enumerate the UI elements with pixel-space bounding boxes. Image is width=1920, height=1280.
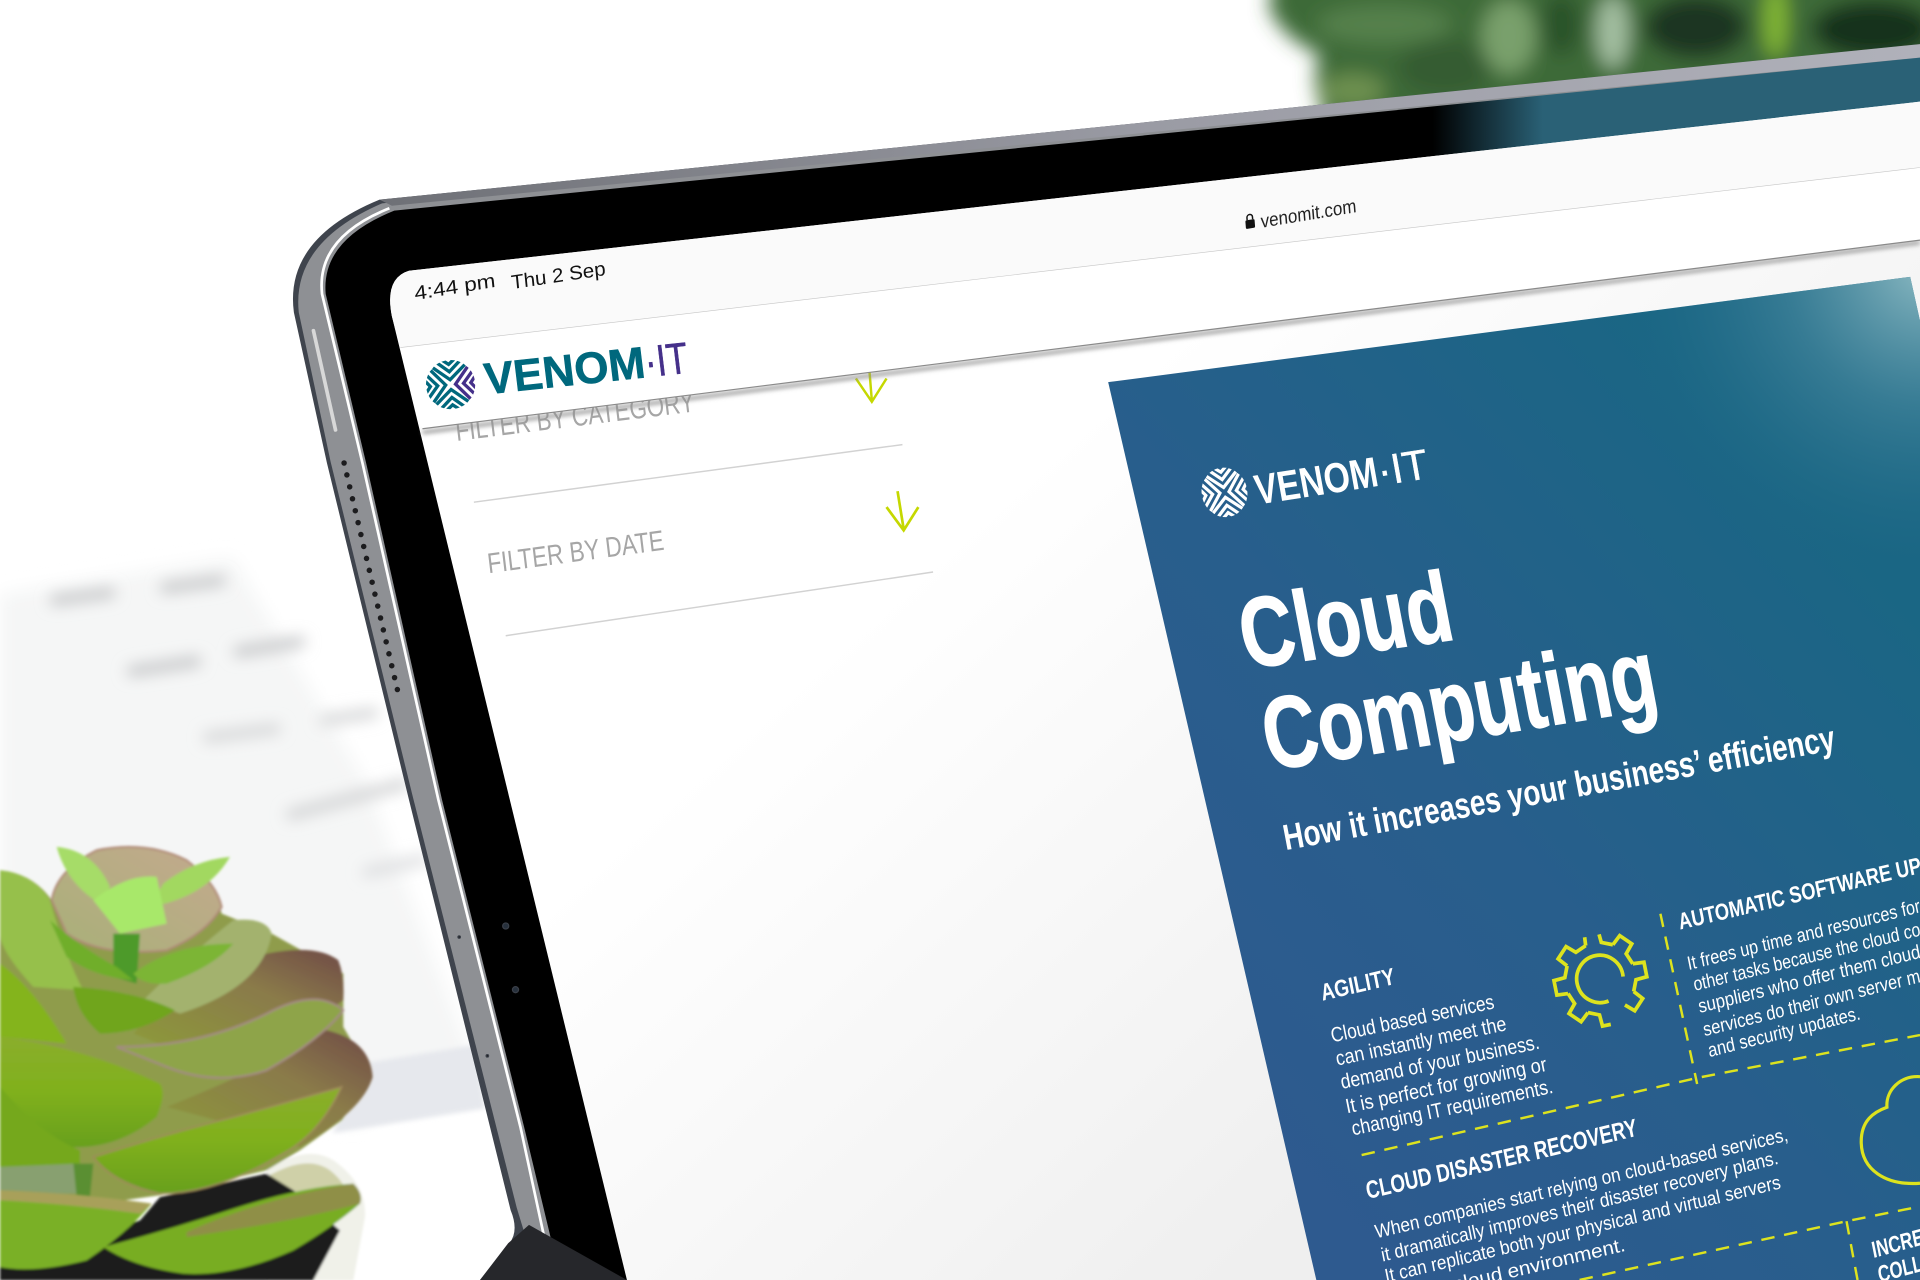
filter divider one: [474, 445, 902, 502]
filter by category: FILTER BY CATEGORY: [454, 386, 697, 448]
succulent plant: [0, 847, 373, 1280]
screen: [390, 102, 1920, 1280]
document logo wordmark: VENOM: [1251, 448, 1382, 514]
arrow: category: [856, 355, 887, 402]
venom logo wordmark: ·IT: [642, 334, 691, 387]
camera sensors: [458, 923, 519, 1057]
lock icon: [1245, 214, 1255, 229]
section: agility: [1318, 963, 1555, 1140]
section: cloud disaster recovery: CLOUD DISASTER RECOVERY: [1363, 1114, 1640, 1205]
section: agility: AGILITY: [1318, 963, 1397, 1007]
side button: [313, 331, 336, 430]
section: agility: It is perfect for growing or: [1343, 1053, 1549, 1118]
title: Computing: [1253, 617, 1666, 792]
section: agility: demand of your business.: [1339, 1031, 1541, 1094]
venom logo wordmark: VENOM: [481, 338, 648, 404]
panel: cloud computing document: [1108, 277, 1920, 1280]
section: agility: can instantly meet the: [1334, 1012, 1508, 1071]
document logo wordmark: ·IT: [1373, 440, 1432, 495]
filter by date: FILTER BY DATE: [486, 525, 666, 580]
speaker grille: [344, 463, 398, 692]
filter divider two: [506, 572, 933, 636]
section: cloud disaster recovery: When companies start relying on cloud-based services,: [1373, 1124, 1790, 1243]
status date: Thu 2 Sep: [510, 258, 607, 294]
blurred paper on desk: [0, 557, 485, 1133]
section: increased collaboration: [1869, 1224, 1920, 1280]
title: Cloud: [1230, 551, 1461, 690]
arrow: date: [887, 491, 918, 530]
section: automatic software updates: [1676, 852, 1920, 1062]
section: agility: Cloud based services: [1329, 991, 1496, 1047]
url: venomit.com: [1260, 196, 1357, 233]
icon: venom logo mark: [426, 360, 476, 410]
header shadow: [422, 243, 1920, 432]
status time: 4:44 pm: [413, 270, 496, 305]
icon: gear: [1546, 924, 1655, 1034]
browser toolbar: [390, 102, 1920, 348]
section: automatic software updates: and security updates.: [1706, 1003, 1862, 1062]
section: cloud disaster recovery: it dramatically improves their disaster recovery plans.: [1379, 1147, 1780, 1267]
icon: cloud: [1861, 1077, 1920, 1183]
icon: white logo mark: [1202, 468, 1248, 518]
dashed dividers: [1362, 914, 1920, 1280]
title: [1230, 551, 1666, 792]
blurred foliage top right: [1269, 0, 1920, 129]
tablet bezel: [325, 58, 1920, 1280]
section: agility: changing IT requirements.: [1350, 1075, 1555, 1140]
site header: [400, 168, 1920, 429]
